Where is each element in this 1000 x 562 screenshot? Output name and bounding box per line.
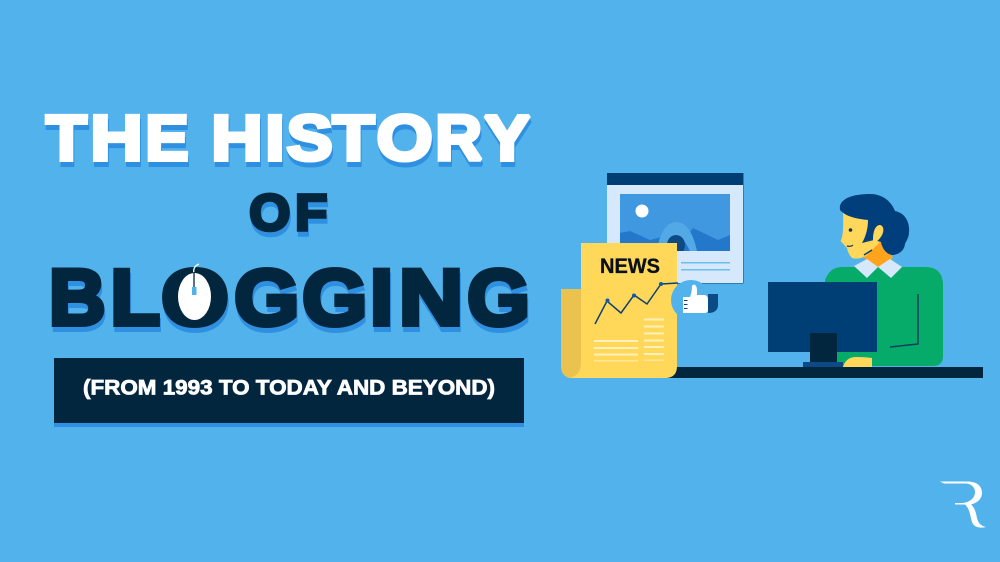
title: Blogging: G: [234, 252, 299, 342]
title: Of: F: [295, 184, 327, 241]
title: The History: I: [265, 102, 285, 174]
hand: [843, 357, 872, 367]
newspaper trend line: [595, 282, 678, 324]
title: The History: Y: [484, 102, 530, 174]
logo: R mark: [940, 482, 986, 528]
title: The History: S: [287, 102, 333, 174]
eye and mouth: [847, 228, 872, 255]
title: The History: R: [435, 102, 482, 174]
subtitle banner: [54, 358, 524, 427]
collar: [854, 259, 902, 278]
title: The History: T: [46, 102, 87, 174]
title: Blogging: O: [161, 252, 229, 342]
title: Blogging: L: [110, 252, 160, 342]
green sweater: [825, 267, 943, 366]
illustration: newspaper: [561, 243, 711, 378]
sweater arm crease: [890, 294, 918, 347]
title: The History: [46, 102, 530, 174]
face: [840, 212, 884, 259]
title: Of: [249, 184, 327, 241]
illustration: person at computer: [825, 194, 943, 367]
icon: computer mouse: [172, 264, 216, 324]
newspaper text lines: [594, 318, 664, 362]
title: The History: T: [333, 102, 374, 174]
title: Blogging: B: [49, 252, 106, 342]
neck: [863, 238, 893, 268]
ear: [873, 225, 883, 243]
illustration: monitor: [768, 282, 877, 367]
title: The History: H: [90, 102, 143, 174]
title: Blogging: [49, 252, 530, 342]
title: Blogging: G: [467, 252, 530, 342]
title: The History: E: [145, 102, 189, 174]
title: The History: H: [211, 102, 263, 174]
illustration: desk: [665, 367, 983, 378]
newspaper headline: NEWS: [600, 255, 660, 278]
title: Blogging: N: [399, 252, 463, 342]
title: Blogging: I: [370, 252, 393, 342]
illustration: browser window: [607, 173, 744, 284]
browser picture: [620, 194, 730, 256]
title: The History: O: [377, 102, 433, 174]
icon: thumbs up: [683, 285, 718, 313]
icon: thumbs up backing circle: [671, 280, 711, 320]
subtitle banner: (FROM 1993 TO TODAY AND BEYOND): [83, 376, 495, 400]
title: Blogging: G: [302, 252, 367, 342]
hair: [840, 194, 909, 255]
title: Of: O: [249, 184, 290, 241]
